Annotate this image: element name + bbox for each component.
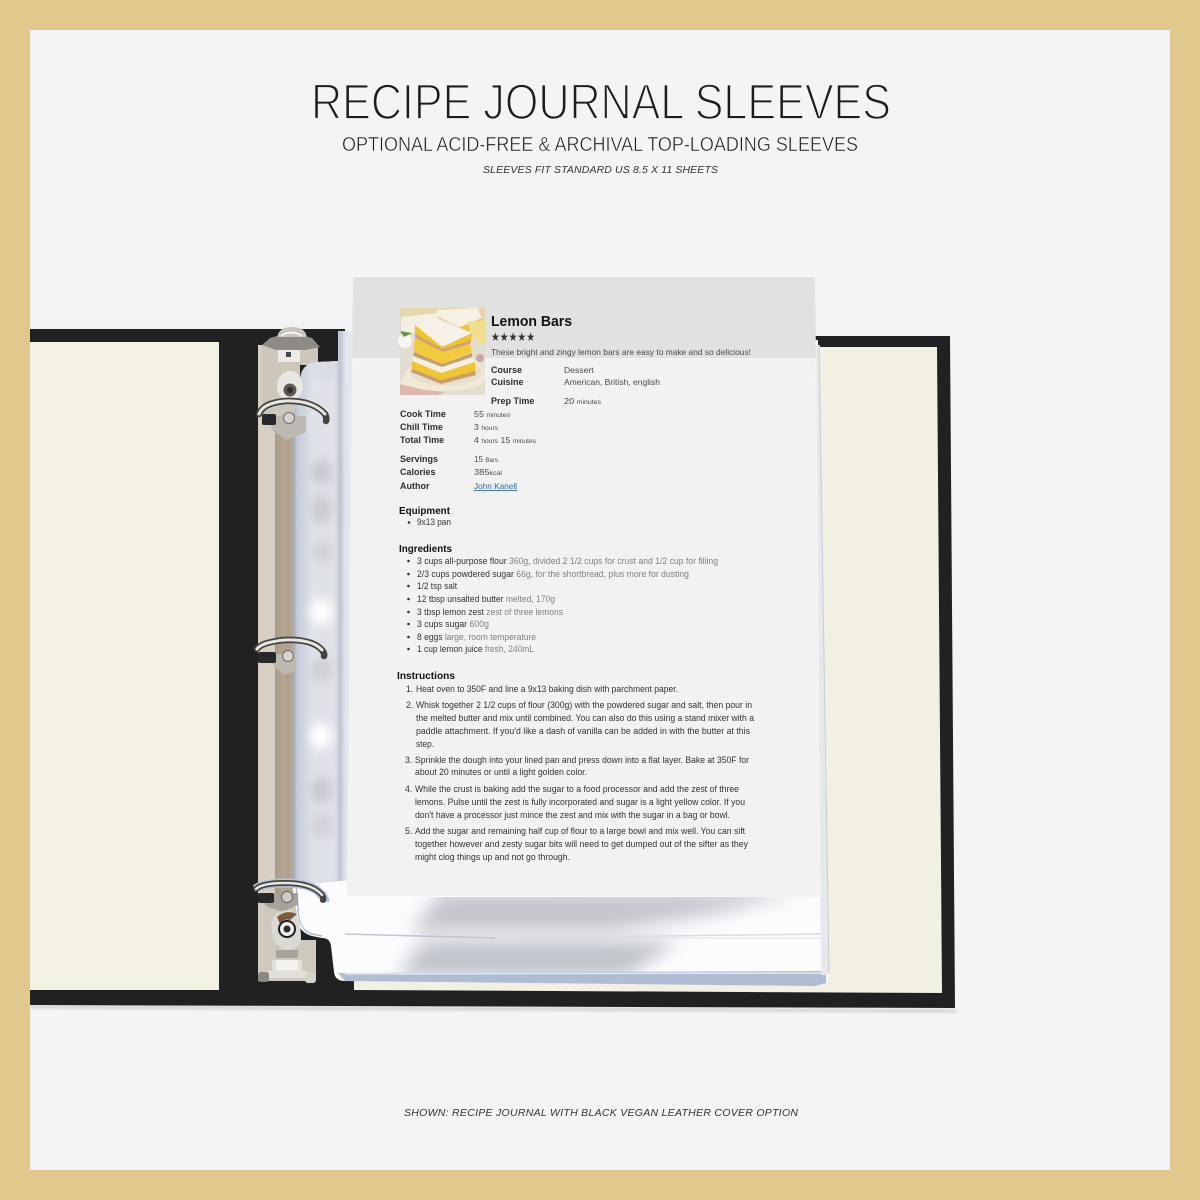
binder shadow [30, 1005, 956, 1013]
ingredients section: 3 cups all-purpose flour 360g, divided 2 1/2 cups for crust and 1/2 cup for filling [417, 556, 718, 566]
instructions section: 5. [405, 826, 412, 836]
instructions section [397, 670, 754, 862]
instructions section: Instructions [397, 670, 455, 682]
open binder [30, 329, 956, 1013]
recipe sheet [347, 277, 820, 897]
instructions section: the melted butter and mix until combined. You can also do this using a stand mixer with a [416, 713, 754, 723]
instructions section: lemons. Pulse until the zest is fully incorporated and sugar is a light yellow color. If you [415, 797, 745, 807]
binder metal plate [258, 345, 318, 981]
black binder cover [30, 329, 955, 1008]
sleeve lower reflections [338, 892, 826, 986]
sleeve right edge [816, 345, 829, 975]
ingredients section: 1/2 tsp salt [417, 581, 458, 591]
instructions section: Add the sugar and remaining half cup of flour to a large bowl and mix well. You can sift [415, 826, 746, 836]
recipe description: These bright and zingy lemon bars are easy to make and so delicious! [491, 347, 751, 357]
ingredients section: 2/3 cups powdered sugar 66g, for the shortbread, plus more for dusting [417, 569, 689, 579]
recipe meta details: 55 minutes [474, 409, 511, 419]
recipe meta details: John Kanell [474, 481, 517, 491]
sheet paper [347, 277, 820, 897]
ingredients section [399, 543, 718, 654]
recipe meta details: Cook Time [400, 409, 446, 419]
recipe meta details: Prep Time [491, 396, 534, 406]
subtitle: OPTIONAL ACID-FREE & ARCHIVAL TOP-LOADING SLEEVES [342, 134, 858, 156]
sleeve left strip with punched holes [293, 331, 352, 936]
title: RECIPE JOURNAL SLEEVES [311, 74, 891, 130]
sleeve body [293, 331, 829, 986]
instructions section: Heat oven to 350F and line a 9x13 baking dish with parchment paper. [416, 684, 678, 694]
white lower-left corner of sleeve [298, 880, 352, 970]
ingredients section: 3 cups sugar 600g [417, 619, 489, 629]
recipe photo: lemon bars [398, 308, 485, 395]
instructions section: step. [416, 739, 434, 749]
instructions section: Whisk together 2 1/2 cups of flour (300g) with the powdered sugar and salt, then pour in [416, 700, 752, 710]
bottom ring mechanism [256, 883, 325, 983]
instructions section: Sprinkle the dough into your lined pan and press down into a flat layer. Bake at 350F for [415, 755, 749, 765]
recipe meta details: Chill Time [400, 422, 443, 432]
sizing note: SLEEVES FIT STANDARD US 8.5 X 11 SHEETS [483, 164, 718, 176]
instructions section: 1. [406, 684, 413, 694]
ingredients section: 3 tbsp lemon zest zest of three lemons [417, 607, 564, 617]
instructions section: about 20 minutes or until a light golden color. [415, 767, 587, 777]
instructions section: 4. [405, 784, 412, 794]
top ring mechanism [259, 327, 326, 440]
ingredients section: 12 tbsp unsalted butter melted, 170g [417, 594, 555, 604]
recipe meta details: Dessert [564, 365, 594, 375]
recipe meta details: 385kcal [474, 467, 503, 477]
right inside page [350, 347, 942, 993]
star rating: ★★★★★ [491, 330, 535, 344]
recipe title: Lemon Bars [491, 313, 572, 330]
instructions section: 2. [406, 700, 413, 710]
sheet grey header band [352, 277, 816, 358]
ingredients section: Ingredients [399, 543, 452, 555]
instructions section: might clog things up and not go through. [415, 852, 570, 862]
left inside page [30, 342, 219, 990]
recipe meta details: 3 hours [474, 422, 499, 432]
recipe meta details: 15 Bars [474, 454, 499, 464]
instructions section: While the crust is baking add the sugar to a food processor and add the zest of three [415, 784, 739, 794]
instructions section: don't have a processor just mince the zest and mix with the sugar in a bag or bowl. [415, 810, 730, 820]
recipe meta details: 20 minutes [564, 396, 602, 406]
equipment section [399, 505, 451, 527]
recipe meta details: Course [491, 365, 522, 375]
instructions section: paddle attachment. If you'd like a dash of vanilla can be added in with the butter at this [416, 726, 751, 736]
instructions section: together however and zesty sugar bits will need to get dumped out of the sifter as they [415, 839, 749, 849]
ingredients section: 8 eggs large, room temperature [417, 632, 536, 642]
instructions section: 3. [405, 755, 412, 765]
recipe meta details: Cuisine [491, 377, 524, 387]
recipe meta details: Calories [400, 467, 436, 477]
plastic sleeve [293, 331, 829, 986]
recipe meta details: 4 hours 15 minutes [474, 435, 537, 445]
recipe meta details: Author [400, 481, 430, 491]
middle ring [257, 640, 324, 675]
binder rings [256, 327, 326, 983]
equipment section: Equipment [399, 505, 450, 517]
footer caption: SHOWN: RECIPE JOURNAL WITH BLACK VEGAN LEATHER COVER OPTION [404, 1107, 798, 1119]
equipment section: 9x13 pan [417, 517, 451, 527]
recipe meta details [400, 365, 660, 491]
recipe meta details: Total Time [400, 435, 444, 445]
recipe meta details: American, British, english [564, 377, 660, 387]
ingredients section: 1 cup lemon juice fresh, 240mL [417, 644, 534, 654]
recipe meta details: Servings [400, 454, 438, 464]
